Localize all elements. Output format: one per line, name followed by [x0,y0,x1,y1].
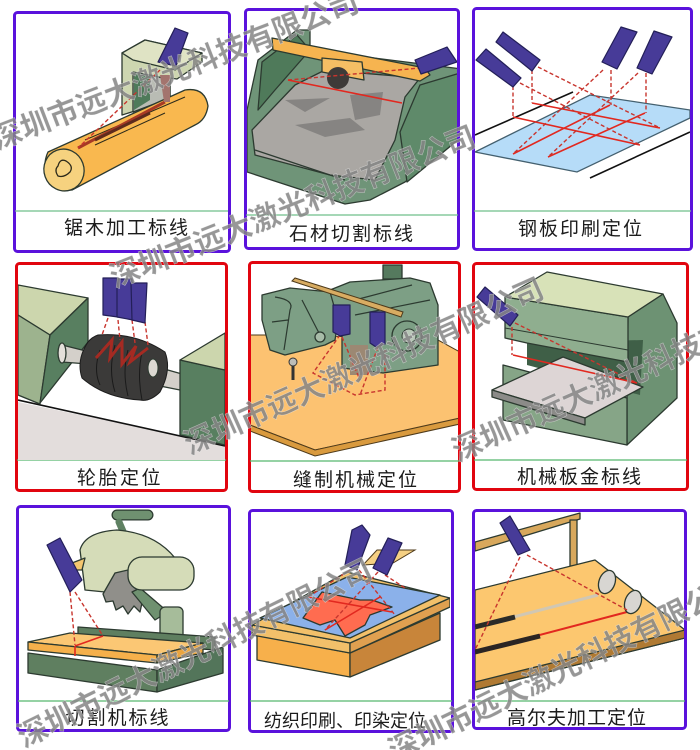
caption: 锯木加工标线 [64,217,190,239]
caption: 钢板印刷定位 [518,218,644,240]
panel: 机械板金标线 [474,264,688,490]
illustration: sewing machine [250,265,460,456]
panel: 纺织印刷、印染定位 [250,510,452,732]
caption: 切割机标线 [65,707,171,729]
caption: 轮胎定位 [77,467,163,489]
watermark rows: 深圳市远大激光科技有限公司 [179,273,549,461]
illustration: log under laser [38,28,208,197]
caption: 纺织印刷、印染定位 [264,711,426,731]
illustration: tyre [18,278,225,460]
panel: 锯木加工标线 [14,12,230,252]
panel: 钢板印刷定位 [474,8,692,250]
panel: 高尔夫加工定位 [474,510,686,729]
watermark rows: 深圳市远大激光科技有限公司 [105,121,480,295]
panel: 石材切割标线 [246,10,470,248]
illustration: textile printing table [252,525,450,677]
watermark rows: 深圳市远大激光科技有限公司 [13,554,378,750]
illustration: sheet metal press [477,272,677,445]
illustration: steel plate [475,27,690,178]
caption: 缝制机械定位 [293,469,419,491]
caption: 高尔夫加工定位 [507,707,647,729]
illustration: stone slab [247,30,470,204]
caption: 机械板金标线 [517,466,643,488]
panel: 缝制机械定位 [250,262,460,492]
caption: 石材切割标线 [289,223,415,245]
panel: 轮胎定位 [16,264,226,490]
panel: 切割机标线 [18,506,230,730]
illustration: cutting machine [28,515,223,692]
illustration: golf club [475,513,685,690]
